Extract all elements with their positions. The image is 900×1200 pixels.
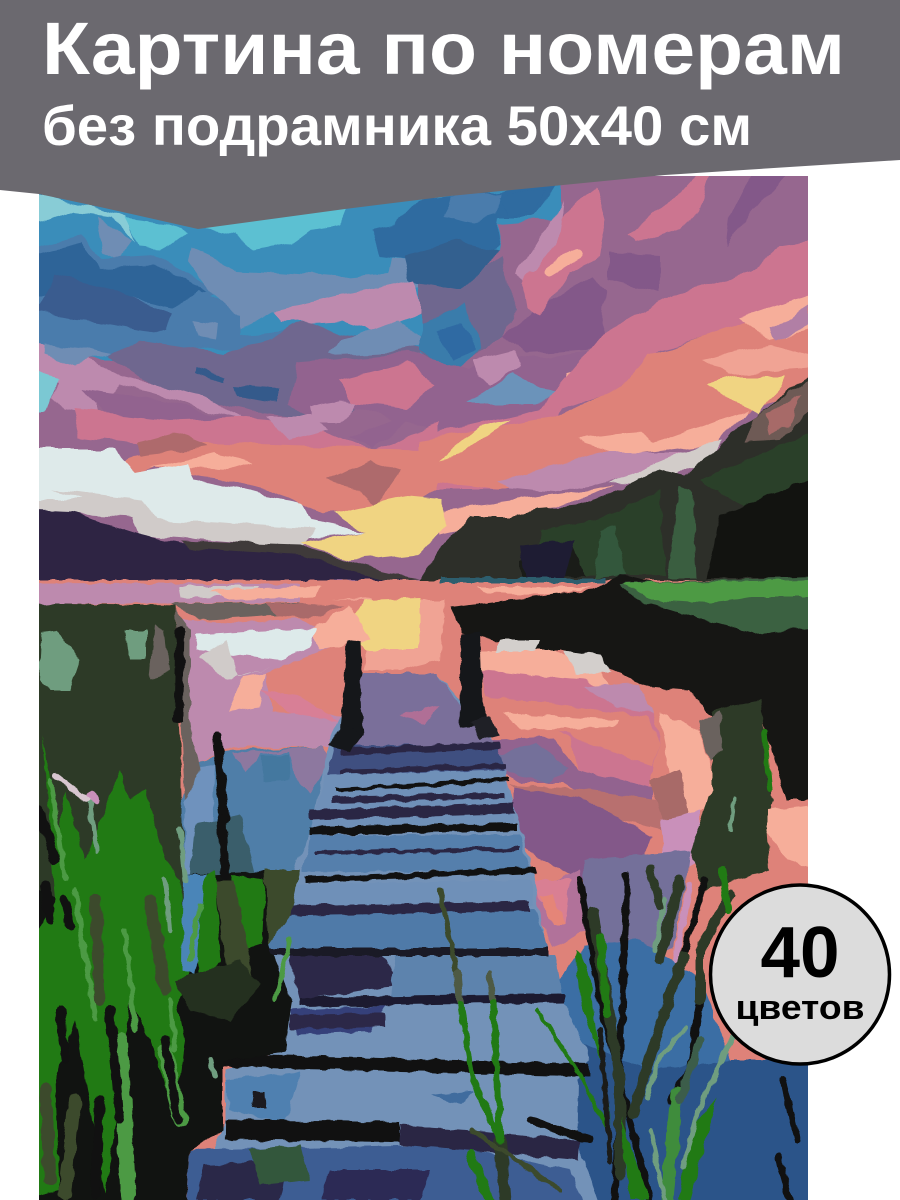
right reeds and foreground grass [440, 730, 797, 1200]
badge label: цветов [736, 989, 864, 1027]
horizon: white cloud, sunset glow and distant hills [20, 450, 447, 582]
header banner [0, 0, 900, 229]
badge: 40 colours [710, 885, 890, 1064]
lake surface and reflections [20, 575, 830, 1200]
pier planks [185, 673, 605, 1200]
tree line [420, 377, 808, 582]
sky: pink and purple clouds [20, 170, 830, 535]
subtitle: без подрамника 50х40 см [42, 94, 752, 157]
sky: blue clouds on the left [20, 170, 560, 420]
badge number: 40 [760, 913, 840, 993]
title: Картина по номерам [42, 7, 845, 90]
pier posts [328, 632, 500, 752]
left reeds and grass [20, 603, 300, 1200]
painting: lake at sunset with wooden pier [20, 170, 830, 1200]
